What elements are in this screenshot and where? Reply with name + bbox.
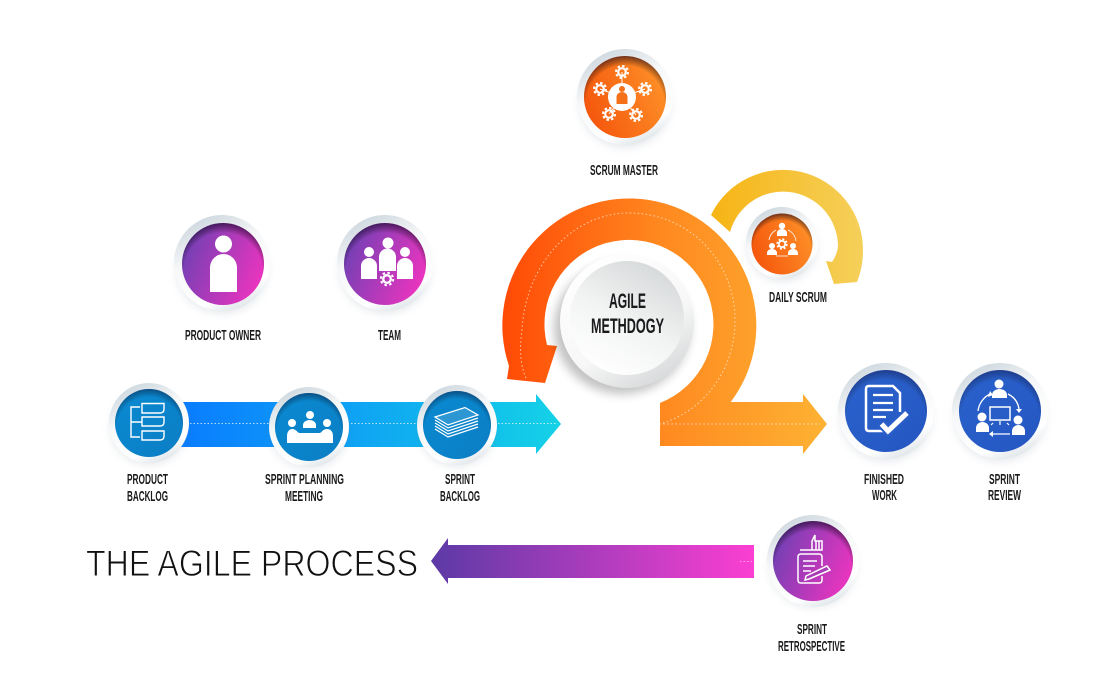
arrow: orange agile loop arrow <box>502 198 827 454</box>
label: product backlog: PRODUCT <box>127 471 168 488</box>
icon: checked document <box>866 386 907 431</box>
node: sprint backlog <box>417 385 497 465</box>
node: finished work <box>838 363 934 460</box>
label: scrum master: SCRUM MASTER <box>590 162 658 179</box>
icon: review cycle <box>976 380 1025 437</box>
label: sprint planning meeting: MEETING <box>285 488 323 505</box>
label: product backlog: BACKLOG <box>127 488 168 505</box>
icon: daily scrum <box>767 223 798 256</box>
center text: METHDOGY <box>591 315 664 338</box>
icon: thumbs up and document <box>798 535 830 583</box>
node: daily scrum <box>746 207 818 280</box>
label: finished work <box>864 471 904 504</box>
label: sprint planning meeting: SPRINT PLANNING <box>265 471 344 488</box>
label: sprint backlog <box>440 471 480 505</box>
node: sprint review <box>952 363 1048 460</box>
node: team <box>337 215 433 312</box>
label: sprint review: SPRINT <box>989 471 1020 488</box>
label: sprint retrospective: RETROSPECTIVE <box>778 638 845 655</box>
icon: team <box>361 238 413 285</box>
center text: AGILE <box>609 290 646 313</box>
node: scrum master <box>577 49 673 146</box>
label: daily scrum: DAILY SCRUM <box>769 289 827 306</box>
icon: paper stack <box>435 408 478 437</box>
center text <box>591 290 664 338</box>
label: sprint review: REVIEW <box>988 487 1021 504</box>
node: sprint retrospective <box>767 515 859 607</box>
label: finished work: FINISHED <box>864 471 904 488</box>
label: sprint backlog: BACKLOG <box>440 488 480 505</box>
arrow: purple retrospective arrow <box>431 538 754 584</box>
node: sprint planning meeting <box>269 387 349 467</box>
icon: scrum master network <box>594 66 651 121</box>
node: product backlog <box>109 383 189 463</box>
icon: backlog list <box>131 404 164 440</box>
label: finished work: WORK <box>872 487 897 504</box>
arrow: blue sprint arrow <box>180 394 561 454</box>
node: product owner <box>174 215 270 312</box>
label: team: TEAM <box>378 327 401 344</box>
label: product owner: PRODUCT OWNER <box>185 327 261 344</box>
label: sprint review <box>988 471 1021 504</box>
label: sprint retrospective <box>778 621 845 655</box>
title: THE AGILE PROCESS <box>86 543 418 584</box>
label: sprint backlog: SPRINT <box>445 471 475 488</box>
label: product backlog <box>127 471 168 505</box>
label: sprint retrospective: SPRINT <box>797 621 827 638</box>
icon: person <box>210 236 237 292</box>
arrow: yellow daily scrum arrow <box>711 170 863 284</box>
label: sprint planning meeting <box>265 471 344 505</box>
icon: meeting table <box>287 411 333 443</box>
center circle: agile methodgy <box>554 254 694 394</box>
